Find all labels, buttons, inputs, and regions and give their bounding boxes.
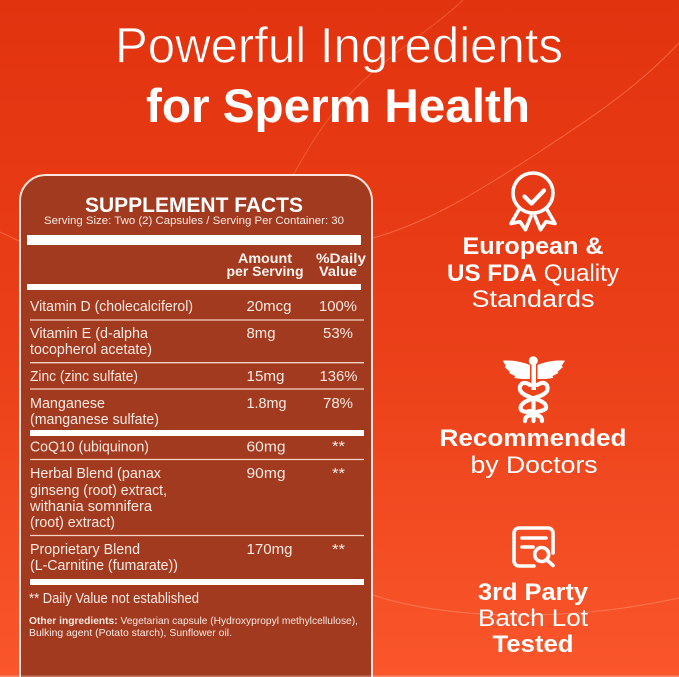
icon: caduceus: [503, 356, 565, 421]
row: vitamin D: 20mcg: [246, 299, 292, 315]
row: proprietary blend: Proprietary Blend: [30, 542, 140, 558]
row: herbal blend: Herbal Blend (panax: [30, 466, 162, 482]
row: manganese: Manganese: [30, 396, 105, 412]
text: european standards: European &: [462, 233, 604, 260]
row: zinc: 15mg: [246, 369, 284, 385]
icon: award ribbon: [511, 173, 555, 230]
footnote: ** Daily Value not established: [29, 591, 199, 607]
text: third party tested: [478, 579, 589, 658]
row: vitamin E: Vitamin E (d-alpha: [30, 326, 149, 342]
icon: document search: [514, 528, 553, 566]
other ingredients: Other ingredients: Vegetarian capsule (Hydroxypropyl methylcellulose),: [29, 615, 358, 627]
row dividers: [30, 320, 364, 536]
row: herbal blend: **: [332, 466, 345, 482]
serving size: Serving Size: Two (2) Capsules / Serving Per Container: 30: [44, 215, 344, 227]
text: recommended by doctors: [440, 425, 626, 479]
row: proprietary blend: 170mg: [246, 542, 292, 558]
row: zinc: 136%: [320, 369, 358, 385]
row: vitamin E: tocopherol acetate): [30, 342, 152, 358]
title: [115, 18, 563, 132]
other ingredients: Bulking agent (Potato starch), Sunflower oil.: [29, 627, 232, 639]
column headers: %Daily: [316, 251, 367, 266]
text: european standards: US FDA Quality: [447, 260, 619, 287]
text: recommended by doctors: Recommended: [440, 425, 626, 452]
text: third party tested: Tested: [492, 631, 574, 658]
row: vitamin E: 8mg: [246, 326, 276, 342]
other ingredients: [29, 615, 358, 639]
row: manganese: (manganese sulfate): [30, 412, 159, 428]
row: manganese: 1.8mg: [246, 396, 286, 412]
text: european standards: Standards: [472, 286, 594, 313]
column headers: [226, 251, 367, 279]
row: CoQ10: **: [332, 439, 345, 455]
row: CoQ10: CoQ10 (ubiquinon): [30, 440, 149, 456]
row: herbal blend: 90mg: [246, 466, 286, 482]
row: vitamin E: [30, 326, 353, 358]
row: vitamin D: Vitamin D (cholecalciferol): [30, 299, 193, 315]
text: recommended by doctors: by Doctors: [470, 452, 598, 479]
row: manganese: [30, 396, 353, 428]
column headers: per Serving: [226, 264, 304, 279]
row: zinc: [30, 369, 358, 385]
row: proprietary blend: [30, 542, 345, 574]
rule bars: [27, 235, 364, 585]
row: manganese: 78%: [323, 396, 353, 412]
row: vitamin E: 53%: [323, 326, 353, 342]
row: vitamin D: [30, 299, 357, 315]
row: zinc: Zinc (zinc sulfate): [30, 369, 138, 385]
text: third party tested: 3rd Party: [478, 579, 589, 606]
row: CoQ10: [30, 439, 345, 456]
heading: supplement facts: SUPPLEMENT FACTS: [85, 193, 303, 217]
row: herbal blend: [29, 466, 345, 531]
row: herbal blend: ginseng (root) extract,: [30, 483, 167, 499]
row: vitamin D: 100%: [319, 299, 357, 315]
row: herbal blend: withania somnifera: [29, 499, 153, 515]
title: for Sperm Health: [146, 79, 530, 132]
column headers: Value: [319, 264, 358, 279]
row: CoQ10: 60mg: [246, 440, 286, 456]
row: proprietary blend: (L-Carnitine (fumarate)): [30, 558, 178, 574]
title: Powerful Ingredients: [115, 18, 563, 74]
text: third party tested: Batch Lot: [478, 605, 588, 632]
text: european standards: [447, 233, 619, 313]
row: herbal blend: (root) extract): [30, 515, 115, 531]
row: proprietary blend: **: [332, 542, 345, 558]
column headers: Amount: [238, 251, 293, 266]
panel: supplement facts: [20, 175, 372, 677]
